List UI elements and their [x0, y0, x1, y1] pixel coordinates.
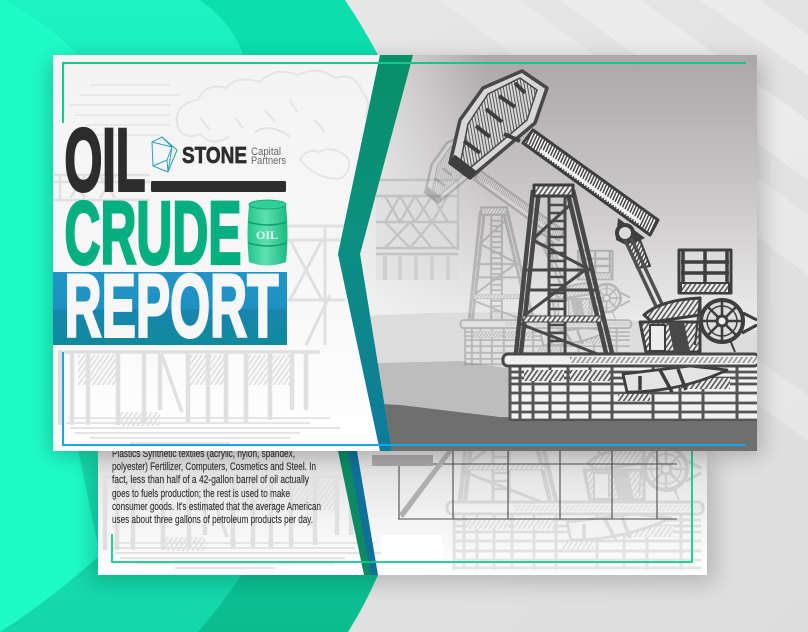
- logo wordmark: Partners: [251, 155, 286, 167]
- back page frame: [112, 451, 692, 562]
- table header bar: [372, 455, 433, 466]
- distant pump jack: [425, 131, 631, 365]
- sketch clouds: [70, 71, 368, 179]
- faded pump artwork on back page: [446, 451, 704, 570]
- main pump jack: [450, 71, 759, 422]
- front frame lines: [63, 63, 746, 445]
- body paragraph: polyester) Fertilizer, Computers, Cosmetics and Steel. In: [112, 461, 316, 473]
- ground strip over base: [509, 421, 757, 422]
- body paragraph: fact, less than half of a 42-gallon barrel of oil actually: [112, 474, 309, 486]
- faded distant rig: [376, 180, 458, 280]
- panel: back page: [98, 440, 707, 575]
- middle hill: [378, 361, 508, 417]
- panel: front photo of pump jacks: [340, 55, 759, 451]
- soft shadow of front card: [50, 60, 762, 456]
- icon: oil barrel: [248, 200, 288, 266]
- faded oil rig: [53, 175, 345, 443]
- body paragraph: consumer goods. It's estimated that the average American: [112, 501, 321, 513]
- body paragraph: uses about three gallons of petroleum products per day.: [112, 514, 313, 526]
- body paragraph: goes to fuels production; the rest is used to make: [112, 488, 290, 500]
- title: OIL: OIL: [64, 110, 146, 210]
- background hill: [370, 312, 757, 368]
- chevron colour band: [338, 55, 413, 451]
- title: CRUDE: CRUDE: [64, 182, 242, 282]
- white gap of back page artwork: [381, 535, 442, 575]
- background: turquoise curved shape: [0, 0, 378, 632]
- soft shadow of back page: [90, 455, 715, 583]
- faded rig artwork on back page: [102, 487, 381, 569]
- title band: REPORT: [53, 256, 287, 356]
- body paragraph: [112, 448, 321, 526]
- title underline bar: [151, 181, 286, 192]
- table diagonal strut: [399, 451, 453, 518]
- icon: oil barrel: OIL: [256, 228, 278, 242]
- body paragraph: Plastics Synthetic textiles (acrylic, nylon, spandex,: [112, 448, 295, 460]
- logo wordmark: Capital: [251, 146, 281, 158]
- logo wordmark: STONE: [182, 142, 247, 168]
- icon: logo gem: [152, 137, 177, 172]
- title band: REPORT: REPORT: [64, 256, 278, 356]
- back page colour band: [338, 451, 378, 575]
- foreground ground: [384, 404, 509, 451]
- table grid: [398, 451, 677, 519]
- panel: front white title card: [53, 55, 380, 451]
